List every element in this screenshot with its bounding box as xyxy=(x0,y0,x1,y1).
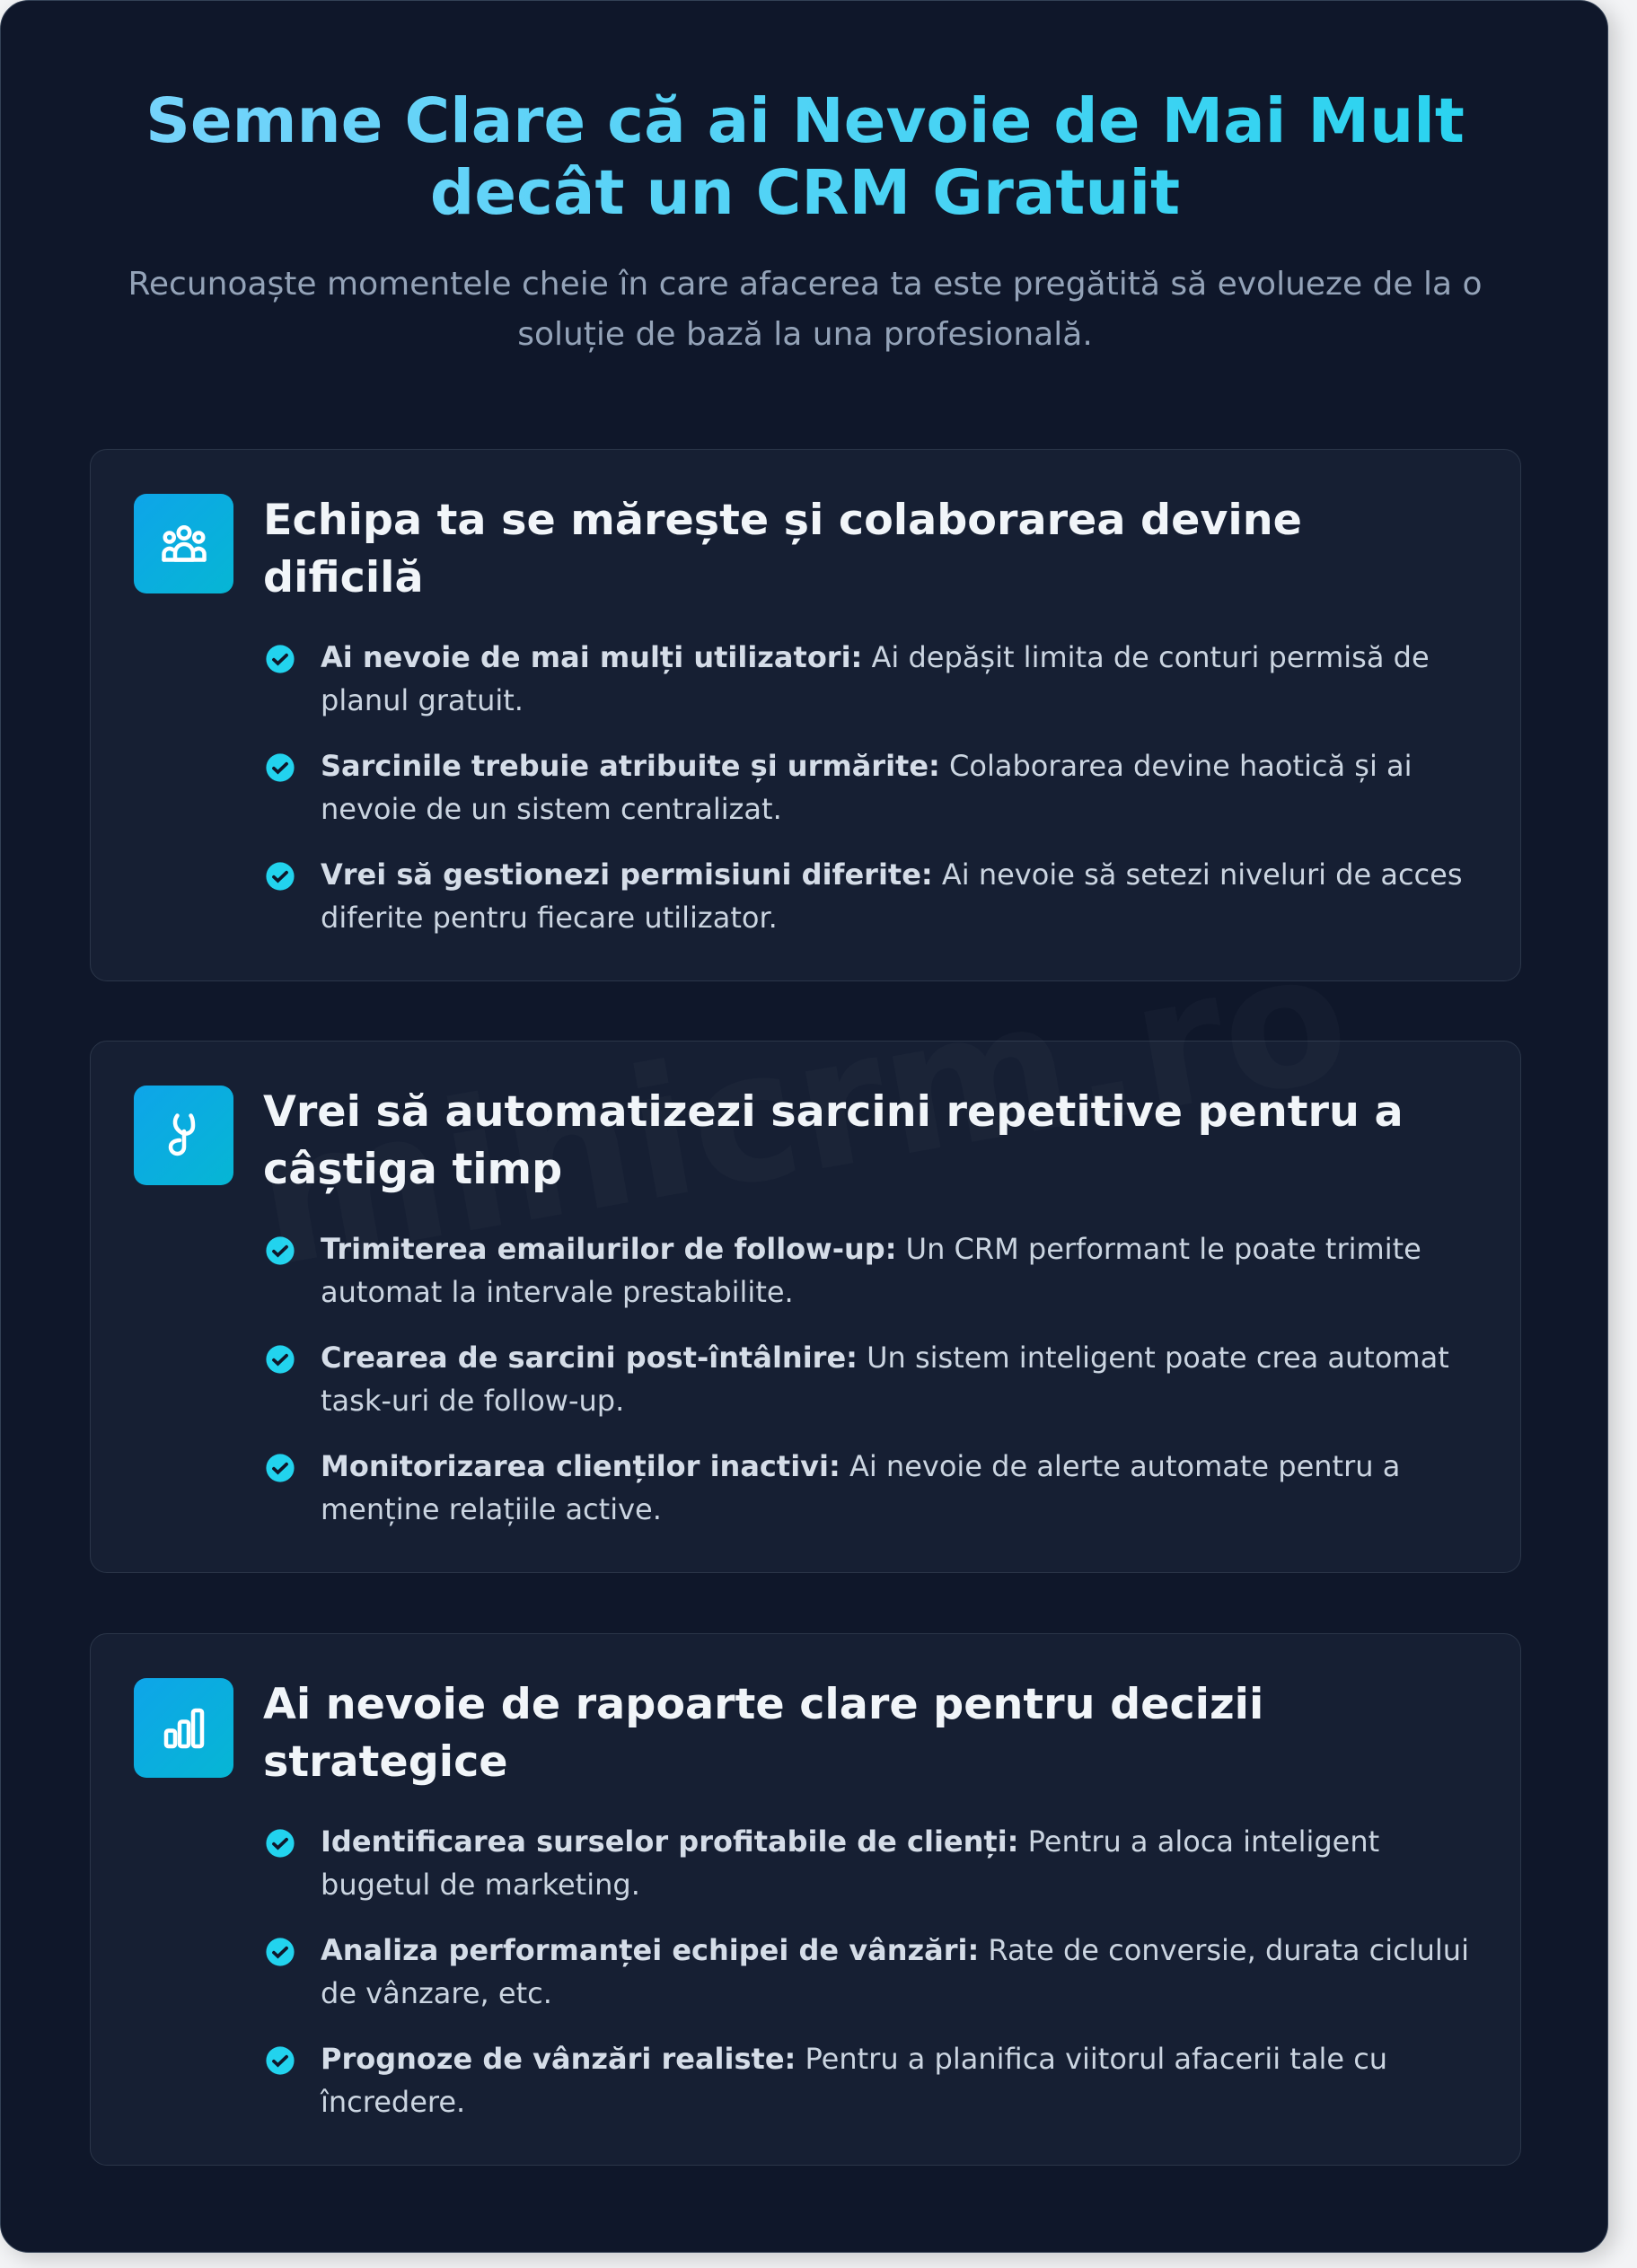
bullet list: Trimiterea emailurilor de follow-up: Un CRM performant le poate trimite automat la intervale prestabilite. xyxy=(321,1232,1421,1309)
heading: Echipa ta se mărește și colaborarea devine dificilă xyxy=(263,496,1302,602)
panel: reports xyxy=(90,1633,1521,2166)
bullet list: Prognoze de vânzări realiste: Pentru a planifica viitorul afacerii tale cu încredere. xyxy=(321,2042,1387,2119)
bullet list: Identificarea surselor profitabile de clienți: Pentru a aloca inteligent bugetul de marketing. xyxy=(321,1824,1379,1902)
icon: users xyxy=(134,494,233,593)
bullet list xyxy=(266,1232,1449,1526)
panel: team growth xyxy=(90,449,1521,981)
heading: Ai nevoie de rapoarte clare pentru decizii strategice xyxy=(263,1680,1263,1787)
bullet list: Sarcinile trebuie atribuite și urmărite: Colaborarea devine haotică și ai nevoie de un sistem centralizat. xyxy=(321,749,1412,826)
title: Semne Clare că ai Nevoie de Mai Mult xyxy=(145,85,1465,157)
main card: minicrm.ro xyxy=(242,910,1362,1308)
bullet list xyxy=(266,1824,1469,2119)
bullet list xyxy=(266,640,1462,935)
heading: Vrei să automatizezi sarcini repetitive pentru a câștiga timp xyxy=(263,1087,1404,1194)
icon: bar chart xyxy=(134,1678,233,1778)
bullet list: Ai nevoie de mai mulți utilizatori: Ai depășit limita de conturi permisă de planul gratuit. xyxy=(321,640,1430,717)
icon: automation xyxy=(134,1086,233,1185)
panel: automation xyxy=(90,1041,1521,1573)
bullet list: Monitorizarea clienților inactivi: Ai nevoie de alerte automate pentru a menține relațiile active. xyxy=(321,1449,1400,1526)
bullet list: Vrei să gestionezi permisiuni diferite: Ai nevoie să setezi niveluri de acces diferite pentru fiecare utilizator. xyxy=(321,857,1462,935)
title: decât un CRM Gratuit xyxy=(430,157,1180,229)
subtitle: Recunoaște momentele cheie în care afacerea ta este pregătită să evolueze de la o soluție de bază la una profesională. xyxy=(128,266,1483,353)
bullet list: Analiza performanței echipei de vânzări: Rate de conversie, durata ciclului de vânzare, etc. xyxy=(321,1933,1469,2010)
bullet list: Crearea de sarcini post-întâlnire: Un sistem inteligent poate crea automat task-uri de follow-up. xyxy=(321,1341,1449,1418)
title xyxy=(1,85,1609,229)
